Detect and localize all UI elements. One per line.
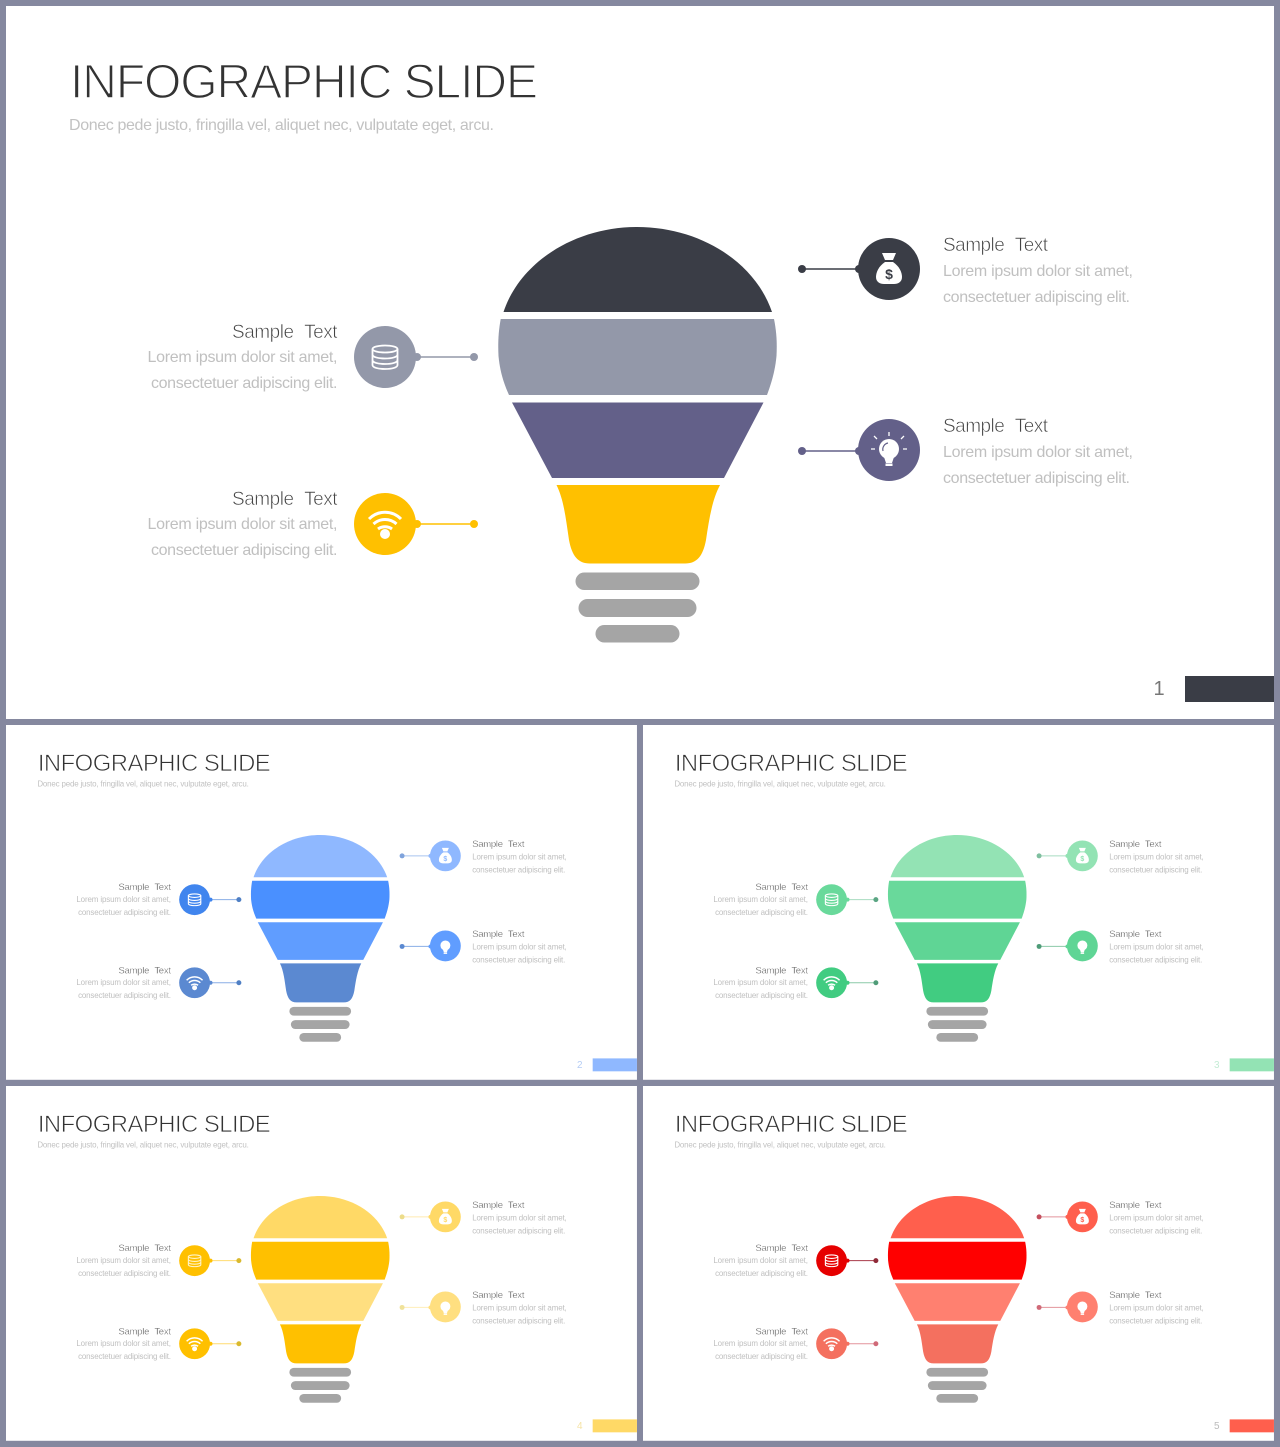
page tab <box>1185 676 1274 702</box>
callout: money: Lorem ipsum dolor sit amet, <box>943 263 1133 280</box>
callout: wifi: Sample Text <box>755 965 808 976</box>
callout: wifi: Lorem ipsum dolor sit amet, <box>76 978 171 987</box>
callout: wifi: Lorem ipsum dolor sit amet, <box>148 516 338 533</box>
page number: 1 <box>1153 678 1165 700</box>
callout: money <box>1037 1200 1204 1235</box>
callout: database: Sample Text <box>755 882 808 893</box>
callout: database <box>713 1243 878 1278</box>
slide 1: dark main <box>6 6 1274 719</box>
callout: idea: consectetuer adipiscing elit. <box>472 955 565 964</box>
callout: database: consectetuer adipiscing elit. <box>715 1269 808 1278</box>
callout: database: Lorem ipsum dolor sit amet, <box>148 349 338 366</box>
subtitle: Donec pede justo, fringilla vel, aliquet nec, vulputate eget, arcu. <box>674 1141 886 1150</box>
callout: idea: consectetuer adipiscing elit. <box>1109 955 1202 964</box>
callout: money: Lorem ipsum dolor sit amet, <box>1109 852 1204 861</box>
callout: database <box>148 322 478 392</box>
callout: wifi: Sample Text <box>118 965 171 976</box>
light bulb <box>888 835 1027 1042</box>
slide 2: blue <box>6 725 637 1080</box>
callout: idea <box>798 416 1133 487</box>
callout: money <box>798 235 1133 306</box>
callout: database <box>76 1243 241 1278</box>
callout: money: $ <box>443 856 447 863</box>
callout: database: Lorem ipsum dolor sit amet, <box>76 1256 171 1265</box>
callout: idea: Sample Text <box>1109 1290 1162 1301</box>
slide 3: green <box>643 725 1274 1080</box>
callout: money: $ <box>1080 1217 1084 1224</box>
title: INFOGRAPHIC SLIDE <box>38 1111 271 1138</box>
page number: 5 <box>1214 1421 1220 1432</box>
callout: idea <box>1037 1290 1204 1325</box>
callout: wifi: Lorem ipsum dolor sit amet, <box>713 978 808 987</box>
callout: money: $ <box>885 266 893 282</box>
callout: wifi <box>713 1326 878 1361</box>
callout: money: consectetuer adipiscing elit. <box>1109 865 1202 874</box>
page number: 2 <box>577 1060 583 1071</box>
callout: database: consectetuer adipiscing elit. <box>151 375 338 392</box>
page number: 3 <box>1214 1060 1220 1071</box>
callout: database: consectetuer adipiscing elit. <box>715 908 808 917</box>
callout: wifi: Lorem ipsum dolor sit amet, <box>713 1339 808 1348</box>
callout: wifi <box>76 1326 241 1361</box>
callout: wifi: consectetuer adipiscing elit. <box>151 542 338 559</box>
page tab <box>593 1058 637 1071</box>
callout: database: Sample Text <box>118 882 171 893</box>
callout: wifi: consectetuer adipiscing elit. <box>715 991 808 1000</box>
callout: money: Sample Text <box>943 235 1049 256</box>
light bulb <box>498 227 777 642</box>
callout: money: consectetuer adipiscing elit. <box>472 1226 565 1235</box>
callout: money: Sample Text <box>472 1200 525 1211</box>
callout: idea: consectetuer adipiscing elit. <box>943 470 1130 487</box>
light bulb <box>251 1196 390 1403</box>
slide 4: yellow <box>6 1086 637 1441</box>
callout: idea: Sample Text <box>472 929 525 940</box>
callout: money <box>400 839 567 874</box>
page number: 4 <box>577 1421 583 1432</box>
callout: idea: Lorem ipsum dolor sit amet, <box>1109 942 1204 951</box>
title: INFOGRAPHIC SLIDE <box>70 56 538 109</box>
callout: database <box>713 882 878 917</box>
callout: money: Sample Text <box>472 839 525 850</box>
callout: idea: Sample Text <box>943 416 1049 437</box>
callout: money: consectetuer adipiscing elit. <box>943 289 1130 306</box>
callout: idea: consectetuer adipiscing elit. <box>1109 1316 1202 1325</box>
callout: database: Sample Text <box>118 1243 171 1254</box>
callout: database: Lorem ipsum dolor sit amet, <box>713 895 808 904</box>
light bulb <box>251 835 390 1042</box>
callout: money: consectetuer adipiscing elit. <box>472 865 565 874</box>
callout: money: consectetuer adipiscing elit. <box>1109 1226 1202 1235</box>
callout: money: $ <box>443 1217 447 1224</box>
callout: idea <box>400 929 567 964</box>
callout: database: Lorem ipsum dolor sit amet, <box>713 1256 808 1265</box>
callout: wifi <box>76 965 241 1000</box>
subtitle: Donec pede justo, fringilla vel, aliquet nec, vulputate eget, arcu. <box>674 780 886 789</box>
callout: database: Sample Text <box>755 1243 808 1254</box>
callout: database <box>76 882 241 917</box>
callout: idea: Sample Text <box>472 1290 525 1301</box>
page tab <box>593 1419 637 1432</box>
callout: money <box>1037 839 1204 874</box>
subtitle: Donec pede justo, fringilla vel, aliquet nec, vulputate eget, arcu. <box>37 1141 249 1150</box>
callout: wifi: consectetuer adipiscing elit. <box>78 1352 171 1361</box>
subtitle: Donec pede justo, fringilla vel, aliquet nec, vulputate eget, arcu. <box>69 117 494 134</box>
callout: database: Lorem ipsum dolor sit amet, <box>76 895 171 904</box>
callout: money: Sample Text <box>1109 839 1162 850</box>
subtitle: Donec pede justo, fringilla vel, aliquet nec, vulputate eget, arcu. <box>37 780 249 789</box>
page tab <box>1230 1419 1274 1432</box>
callout: wifi: Lorem ipsum dolor sit amet, <box>76 1339 171 1348</box>
slide 5: red <box>643 1086 1274 1441</box>
callout: database: consectetuer adipiscing elit. <box>78 908 171 917</box>
callout: wifi: Sample Text <box>755 1326 808 1337</box>
callout: wifi <box>713 965 878 1000</box>
callout: idea <box>400 1290 567 1325</box>
callout: idea: Lorem ipsum dolor sit amet, <box>1109 1303 1204 1312</box>
callout: money: Lorem ipsum dolor sit amet, <box>472 852 567 861</box>
callout: database: Sample Text <box>232 322 338 343</box>
callout: money: Lorem ipsum dolor sit amet, <box>1109 1213 1204 1222</box>
callout: idea: Lorem ipsum dolor sit amet, <box>472 1303 567 1312</box>
callout: money: Lorem ipsum dolor sit amet, <box>472 1213 567 1222</box>
callout: wifi <box>148 489 478 559</box>
callout: money: Sample Text <box>1109 1200 1162 1211</box>
callout: money: $ <box>1080 856 1084 863</box>
callout: money <box>400 1200 567 1235</box>
light bulb <box>888 1196 1027 1403</box>
title: INFOGRAPHIC SLIDE <box>38 750 271 777</box>
callout: idea <box>1037 929 1204 964</box>
callout: idea: Lorem ipsum dolor sit amet, <box>943 444 1133 461</box>
callout: database: consectetuer adipiscing elit. <box>78 1269 171 1278</box>
callout: wifi: Sample Text <box>118 1326 171 1337</box>
title: INFOGRAPHIC SLIDE <box>675 1111 908 1138</box>
callout: wifi: consectetuer adipiscing elit. <box>78 991 171 1000</box>
page tab <box>1230 1058 1274 1071</box>
callout: wifi: Sample Text <box>232 489 338 510</box>
callout: wifi: consectetuer adipiscing elit. <box>715 1352 808 1361</box>
callout: idea: Lorem ipsum dolor sit amet, <box>472 942 567 951</box>
callout: idea: Sample Text <box>1109 929 1162 940</box>
callout: idea: consectetuer adipiscing elit. <box>472 1316 565 1325</box>
title: INFOGRAPHIC SLIDE <box>675 750 908 777</box>
